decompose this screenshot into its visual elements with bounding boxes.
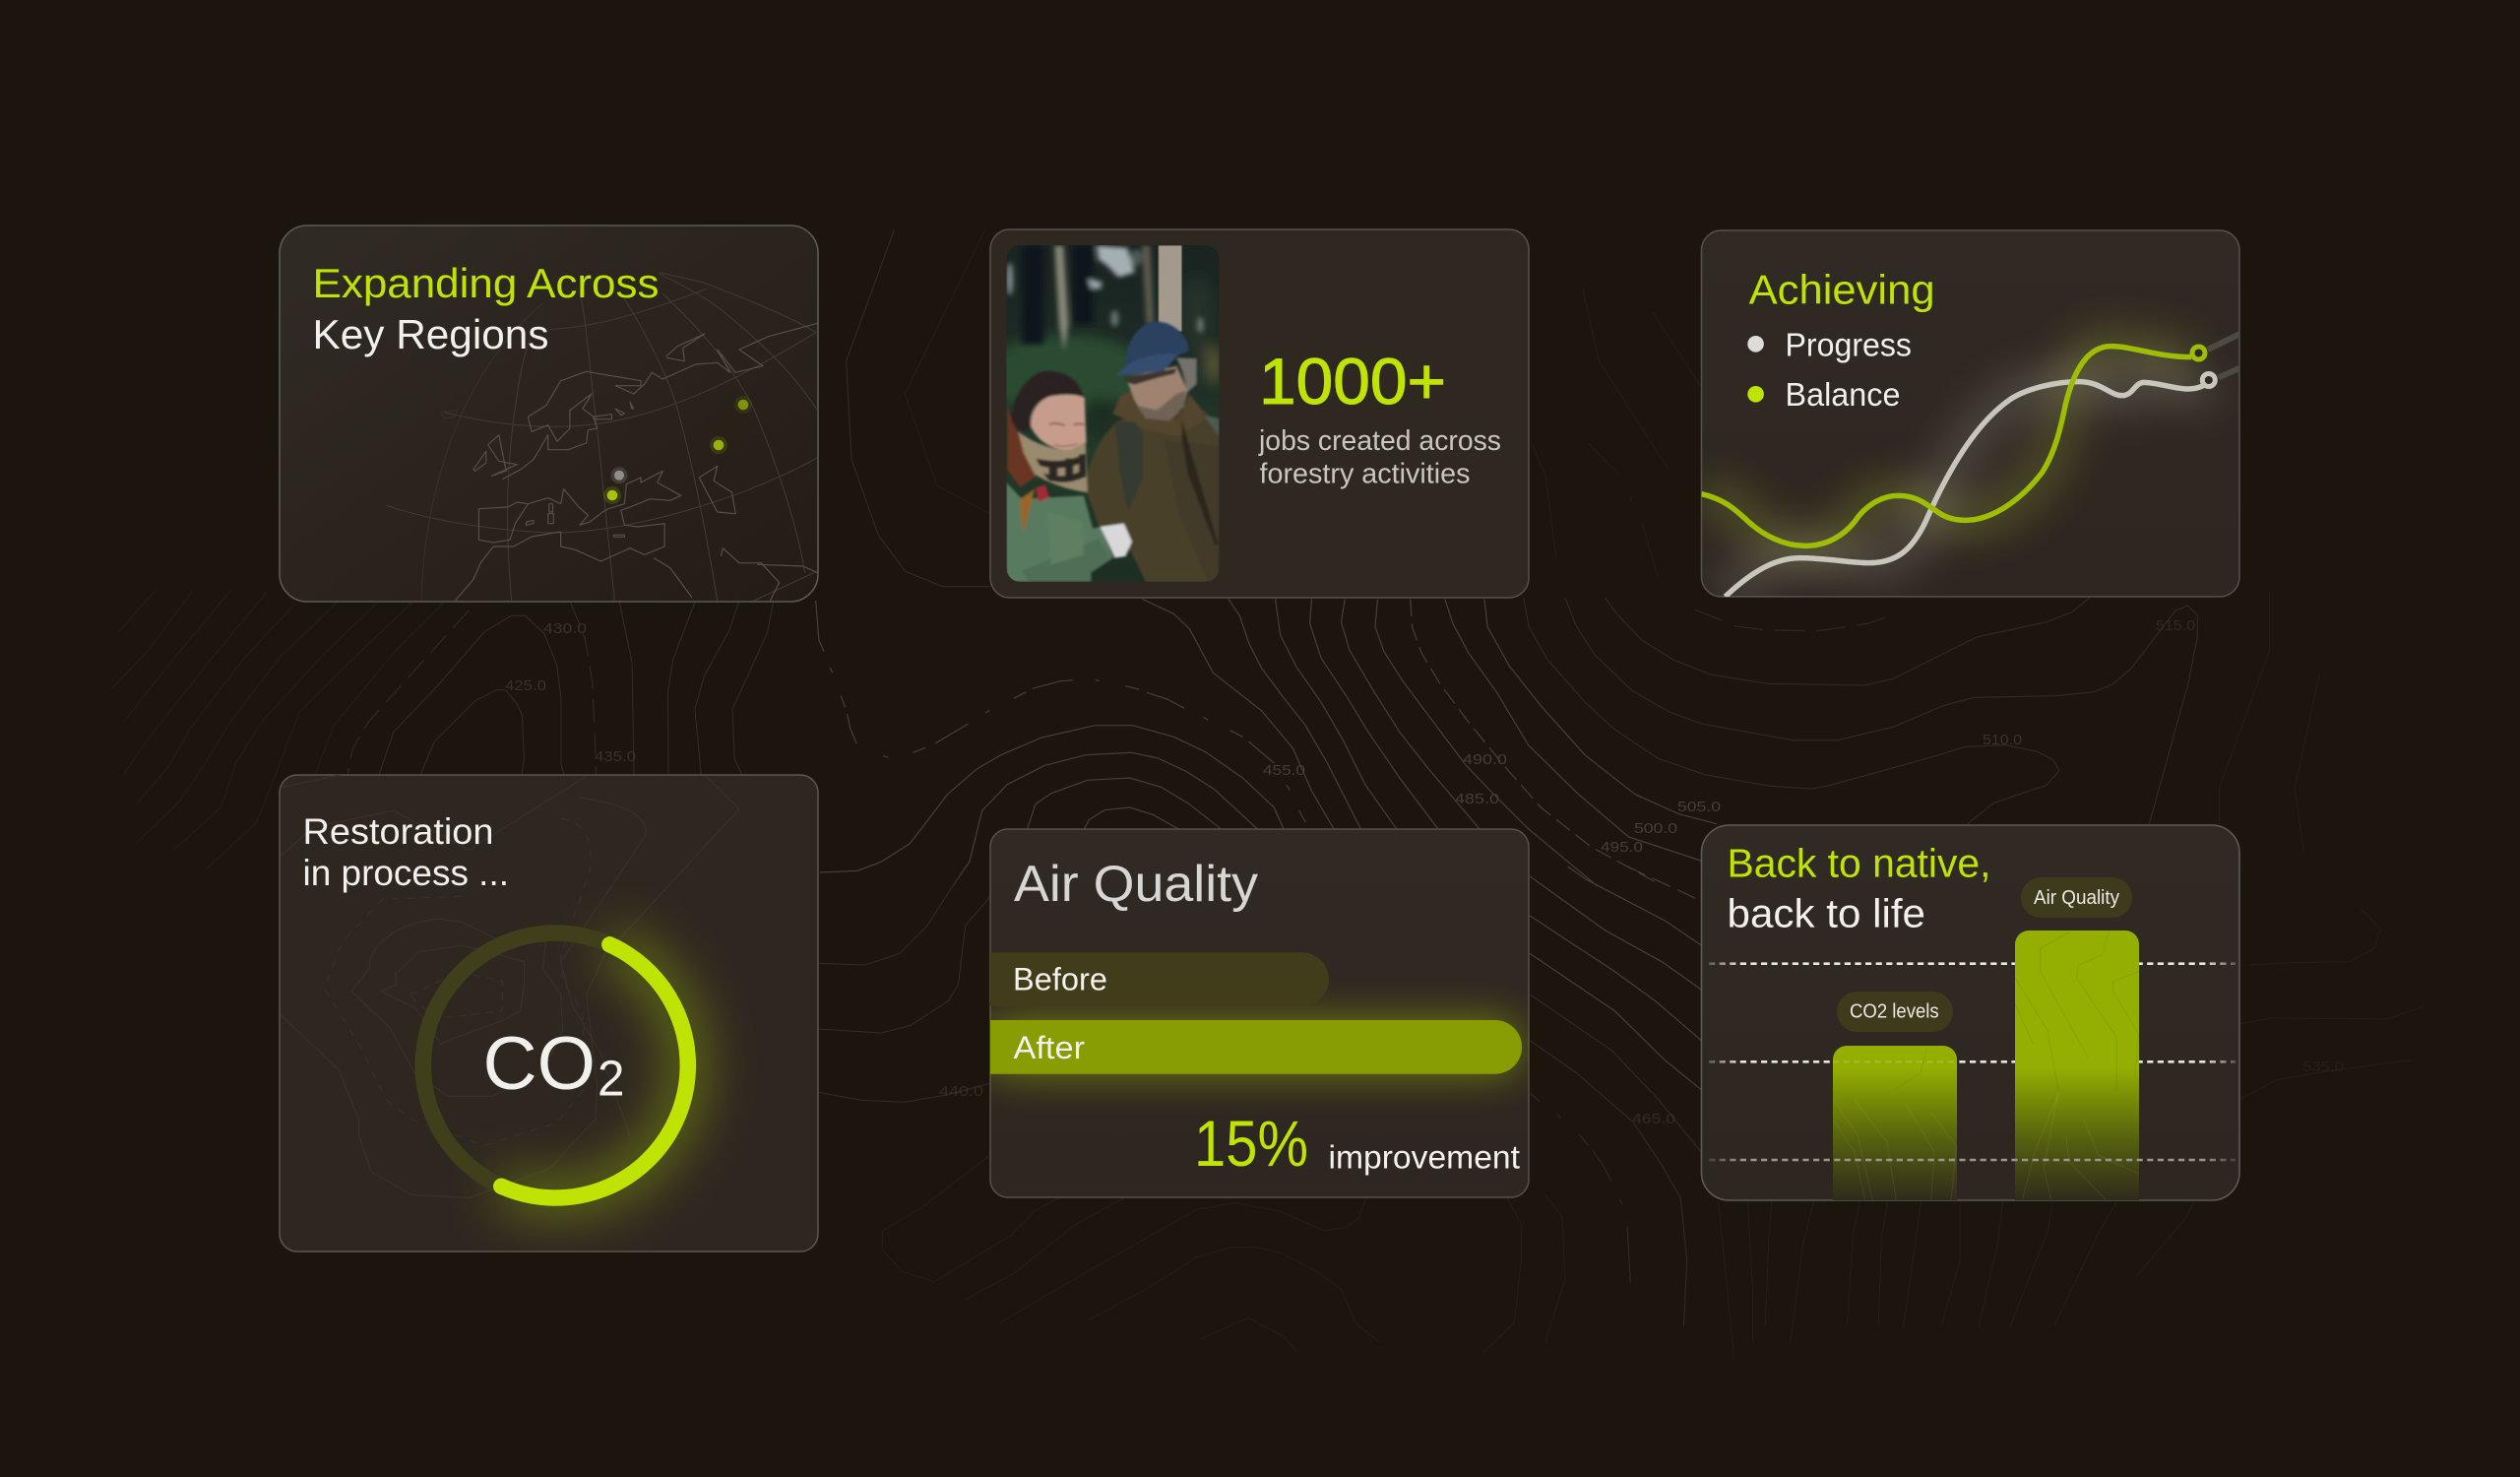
heading: achieving: Achieving [1749,266,1935,312]
elevation labels: 515.0 [2156,617,2195,634]
bar: before [990,952,1329,1006]
heading: expanding across: Expanding Across [313,260,660,306]
heading: back to native: Back to native, [1727,841,1990,886]
panel: air quality [984,829,1529,1197]
progress ring [423,933,688,1198]
elevation labels: 505.0 [1677,799,1721,815]
elevation labels: 535.0 [2302,1059,2344,1075]
panel: expanding across key regions [280,225,818,602]
heading: back to life: back to life [1727,890,1925,935]
stat: 1000+: 1000+ [1259,345,1446,417]
elevation labels: 425.0 [505,677,546,694]
woman [1007,404,1037,487]
legend: progress: Progress [1786,327,1912,362]
stat: 15%: 15% [1194,1107,1308,1180]
panel: jobs created [981,229,1529,598]
elevation labels: 430.0 [543,620,587,637]
pill: air quality [2021,877,2132,918]
background: topographic contour lines [111,229,2425,1359]
description text: forestry activities [1260,459,1471,490]
label: CO2: CO [482,1022,596,1106]
bar label: after: After [1014,1030,1085,1065]
bar: air quality [2015,931,2139,1200]
elevation labels [505,617,2344,1127]
elevation labels: 465.0 [1632,1111,1675,1127]
heading: restoration in process [303,811,509,893]
ring glow [501,944,688,1198]
label: CO2: 2 [598,1051,624,1107]
label: improvement: improvement [1329,1139,1520,1176]
bar chart [1709,931,2236,1201]
heading: restoration in process: in process ... [303,853,509,893]
heading: air quality: Air Quality [1014,856,1258,913]
bar label: before: Before [1013,962,1107,997]
pill: CO2 levels: CO2 levels [1850,1000,1939,1022]
map pins [603,396,752,504]
map: Europe and graticule [386,273,817,601]
pill: CO2 levels [1837,992,1953,1032]
gridlines [1709,964,2236,1061]
heading: key regions: Key Regions [313,311,549,357]
photo: two people in a forest [1006,245,1219,582]
scarf checks [1037,454,1086,482]
pill: air quality: Air Quality [2034,887,2119,909]
legend: balance: Balance [1786,376,1900,413]
bar: after [990,1020,1522,1074]
elevation labels: 490.0 [1463,751,1507,768]
line chart [1701,334,2239,597]
lower gridline [1709,1159,2236,1161]
elevation labels: 435.0 [595,748,636,765]
man [1086,411,1220,582]
after bar glow [984,1020,1522,1074]
elevation labels: 510.0 [1983,732,2022,748]
panel: achieving progress and balance [1701,230,2239,597]
bar: CO2 levels [1833,1046,1957,1200]
panel: restoration in process [280,765,818,1252]
description text: jobs created across [1258,425,1501,457]
elevation labels: 500.0 [1634,820,1677,837]
elevation labels: 485.0 [1455,791,1499,807]
description text [1258,425,1501,490]
panel: back to native [1701,825,2239,1201]
elevation labels: 495.0 [1601,839,1643,856]
elevation labels: 440.0 [939,1083,983,1100]
elevation labels: 455.0 [1263,762,1305,779]
heading: restoration in process: Restoration [303,811,494,852]
